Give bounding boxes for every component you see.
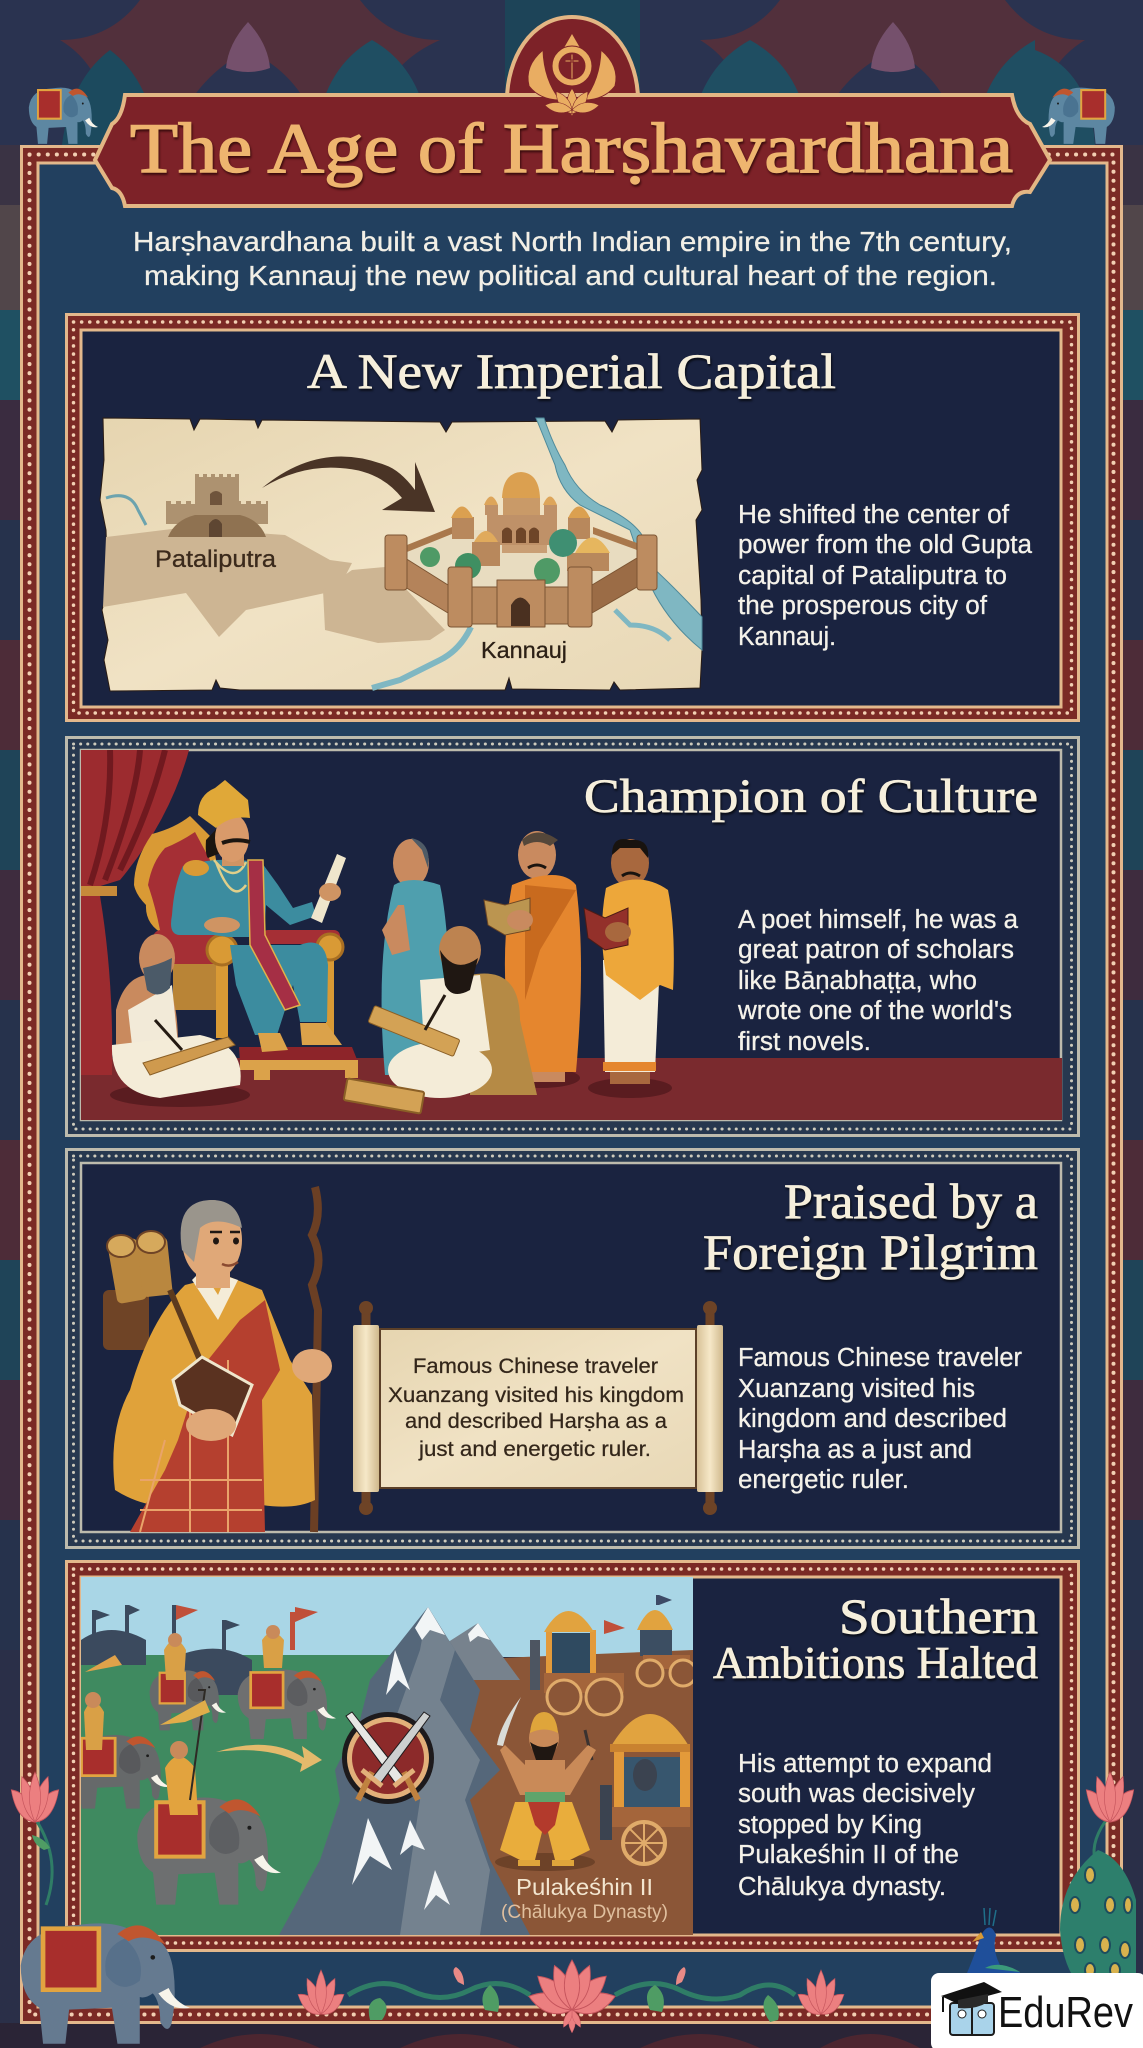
- head: [222, 855, 244, 866]
- heading: Champion of Culture: [584, 770, 1038, 823]
- throne: [134, 816, 343, 1038]
- icon: graduation cap and book: [941, 1982, 1002, 2035]
- staff: [312, 1187, 318, 1532]
- heading: [703, 1173, 1038, 1280]
- label: Chalukya Dynasty: (Chālukya Dynasty): [501, 1902, 668, 1923]
- body text: [738, 501, 1033, 651]
- body text: the prosperous city of: [738, 592, 988, 620]
- panel: Praised by a Foreign Pilgrim: [66, 1150, 1078, 1548]
- towers: [385, 535, 407, 590]
- icon: bottom-left elephant: [21, 1923, 190, 2044]
- body text: Kannauj.: [738, 623, 836, 651]
- palace: [487, 515, 557, 545]
- rivers: [536, 418, 702, 650]
- heading: A New Imperial Capital: [307, 343, 836, 399]
- scene: royal court: [81, 750, 1062, 1120]
- intro text: [133, 226, 1012, 291]
- body text: Pulakeśhin II of the: [738, 1841, 959, 1869]
- icon: right lotus and stem: [1083, 1772, 1137, 1860]
- body text: power from the old Gupta: [738, 531, 1033, 559]
- body text: He shifted the center of: [738, 501, 1010, 529]
- map parchment: [100, 418, 702, 691]
- heading: Praised by a: [784, 1173, 1038, 1229]
- scroll text: [388, 1354, 684, 1461]
- standing orange scholar: [484, 831, 581, 1088]
- panel: A New Imperial Capital: [66, 314, 1078, 720]
- body text: [737, 906, 1019, 1056]
- icon: peacock: [964, 1850, 1136, 1980]
- mountains: [279, 1607, 530, 1935]
- king: [171, 780, 346, 1052]
- icon: top-right elephant: [1042, 88, 1115, 144]
- heading: Ambitions Halted: [713, 1638, 1038, 1688]
- heading: Foreign Pilgrim: [703, 1224, 1038, 1280]
- icon: left lotus and stem: [8, 1772, 62, 1905]
- footstool: [239, 1047, 357, 1060]
- illustration: Xuanzang: [103, 1187, 332, 1532]
- necklace: [214, 860, 246, 891]
- body text: Xuanzang visited his: [738, 1375, 975, 1403]
- floor: [81, 1058, 1062, 1120]
- head: [196, 1262, 230, 1288]
- front pavilions: [472, 542, 500, 566]
- upper right chariot: [640, 1630, 672, 1656]
- upper left chariot: [550, 1633, 590, 1675]
- body text: Chālukya dynasty.: [738, 1873, 946, 1901]
- emblem arch: [507, 17, 638, 100]
- body text: south was decisively: [738, 1780, 975, 1808]
- icon: Pataliputra fort: [166, 472, 268, 537]
- label: Kannauj: Kannauj: [481, 637, 567, 663]
- scroll text: just and energetic ruler.: [418, 1437, 651, 1461]
- body text: kingdom and described: [738, 1405, 1007, 1433]
- body text: Famous Chinese traveler: [738, 1344, 1023, 1372]
- right lotus: [796, 1970, 846, 2020]
- side walls: [405, 558, 448, 613]
- background cavalry: [81, 1605, 252, 1695]
- hands: [292, 1349, 332, 1383]
- icon: Kannauj fort: [385, 472, 657, 627]
- chariots: [530, 1595, 696, 1864]
- feet: [258, 1033, 288, 1052]
- scroll text: Famous Chinese traveler: [413, 1354, 658, 1378]
- standing white-robed scholar: [584, 839, 674, 1098]
- body text: first novels.: [738, 1028, 871, 1056]
- seated bearded scholar: [368, 926, 537, 1098]
- panel: Champion of Culture: [66, 738, 1078, 1136]
- legs: [230, 942, 328, 1035]
- green field: [81, 1655, 421, 1935]
- riders and flags: [84, 1625, 322, 1815]
- robe: [113, 1275, 315, 1507]
- body text: [738, 1750, 992, 1901]
- body text: energetic ruler.: [738, 1466, 909, 1494]
- body text: wrote one of the world's: [737, 997, 1012, 1025]
- logo: EduRev: [931, 1973, 1143, 2048]
- body text: great patron of scholars: [738, 936, 1014, 964]
- scroll graphic: [353, 1301, 723, 1515]
- torso and arms: [171, 860, 316, 937]
- scroll text: Xuanzang visited his kingdom: [388, 1383, 684, 1407]
- center lotus: [527, 1960, 617, 2033]
- backpack: [103, 1290, 149, 1350]
- map regions: [103, 528, 352, 637]
- icon: crossed swords shield: [342, 1712, 434, 1804]
- scene: battlefield: [68, 1577, 696, 1935]
- label: Pataliputra: Pataliputra: [155, 546, 277, 573]
- sky: [81, 1577, 693, 1657]
- title banner: [95, 17, 1050, 206]
- standing teal scholar: [382, 838, 450, 1075]
- sash: [248, 860, 300, 1010]
- seated scribe: [110, 934, 250, 1107]
- icon: lotus emblem: [528, 33, 616, 117]
- curtain: [81, 750, 189, 892]
- advance arrow: [216, 1745, 322, 1772]
- body text: capital of Pataliputra to: [738, 562, 1007, 590]
- lower chariot: [624, 1757, 680, 1809]
- icon: bottom lotus garland: [296, 1960, 846, 2033]
- back walls: [407, 527, 637, 552]
- intro text: making Kannauj the new political and cultural heart of the region.: [144, 260, 997, 291]
- brown land: [470, 1650, 693, 1935]
- book: [173, 1357, 252, 1435]
- label: Pulakeshin II: Pulakeśhin II: [516, 1874, 653, 1900]
- body text: stopped by King: [738, 1811, 922, 1839]
- body text: A poet himself, he was a: [738, 906, 1019, 934]
- body text: Harṣha as a just and: [738, 1436, 972, 1464]
- palm leaf bundle: [344, 1078, 424, 1114]
- body text: like Bāṇabhaṭṭa, who: [738, 967, 977, 995]
- icon: top-left elephant: [29, 88, 98, 144]
- side towers: [452, 517, 474, 539]
- heading: [713, 1588, 1038, 1688]
- arrow: Pataliputra to Kannauj: [262, 456, 435, 512]
- scroll text: and described Harṣha as a: [405, 1409, 667, 1433]
- trees: [420, 547, 440, 567]
- Pulakeshin II figure: [495, 1697, 596, 1871]
- intro text: Harṣhavardhana built a vast North Indian empire in the 7th century,: [133, 226, 1012, 257]
- left lotus: [296, 1970, 346, 2020]
- body text: [738, 1344, 1023, 1494]
- panel: Southern Ambitions Halted: [66, 1562, 1078, 1950]
- body text: His attempt to expand: [738, 1750, 992, 1778]
- scroll: [311, 854, 346, 923]
- army elephants: [68, 1669, 336, 1905]
- heading: Southern: [839, 1588, 1038, 1644]
- title: The Age of Harṣhavardhana: [130, 110, 1013, 188]
- banner plaque: [95, 95, 1050, 206]
